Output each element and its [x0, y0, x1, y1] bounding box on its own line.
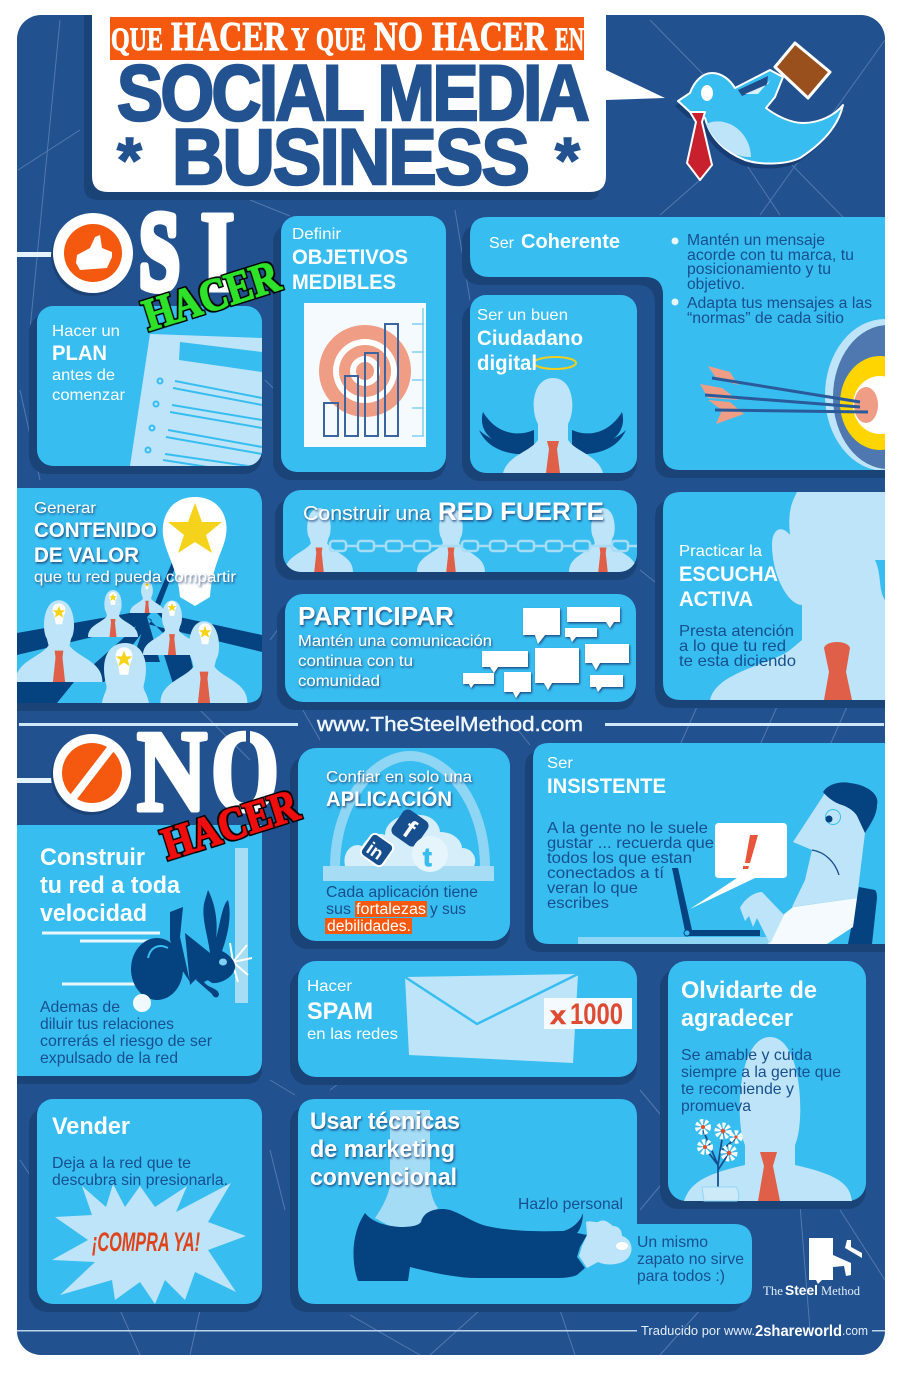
spam text: Hacer	[307, 978, 353, 995]
panel: red fuerte	[275, 490, 637, 580]
heading no: O	[211, 708, 279, 836]
panel: usar tecnicas de marketing	[290, 1099, 752, 1312]
participar text: comunidad	[298, 673, 380, 690]
vender body: Deja a la red que te	[52, 1155, 191, 1172]
coherente bullet list: posicionamiento y tu	[687, 261, 831, 278]
icon: envelope x1000: x	[550, 1000, 567, 1030]
icon: prohibited sign	[51, 734, 131, 815]
panel: plan	[29, 306, 262, 474]
logo: the steel method: Steel	[785, 1282, 818, 1298]
confiar body: y sus	[430, 901, 466, 918]
construir heading	[40, 844, 181, 927]
construir body: correrás el riesgo de ser	[40, 1033, 213, 1050]
objetivos text: OBJETIVOS	[292, 246, 408, 269]
illustration: social icons under dome	[323, 756, 494, 881]
illustration: man at laptop	[578, 782, 877, 944]
red fuerte text	[303, 498, 604, 526]
panel: vender	[29, 1099, 262, 1312]
contenido text	[34, 500, 237, 586]
olvidarte heading: Olvidarte de	[681, 977, 817, 1004]
icon: linkedin: in	[363, 838, 387, 864]
illustration: listening head	[710, 492, 885, 700]
heading si	[139, 188, 235, 315]
logo: the steel method: The	[763, 1283, 783, 1298]
panel: objetivos medibles	[273, 216, 446, 480]
plan text: antes de	[52, 367, 115, 384]
confiar body: fortalezas	[356, 901, 426, 918]
illustration: person with flowers	[684, 1037, 852, 1201]
compra ya: ¡COMPRA YA!	[92, 1227, 200, 1257]
orange title banner: Y	[291, 22, 309, 58]
insistente heading	[547, 755, 666, 798]
confiar body: Cada aplicación tiene	[326, 884, 478, 901]
panel: participar	[277, 594, 636, 710]
icon: facebook	[389, 807, 431, 850]
title: business: BUSINESS	[172, 112, 528, 201]
icon: speech bubbles	[463, 607, 629, 698]
heading no	[137, 708, 279, 836]
escucha heading: ESCUCHA	[679, 563, 778, 586]
panel: escucha activa	[655, 492, 885, 708]
icon: starburst	[52, 1183, 246, 1304]
label: green hacer: HACER	[137, 251, 286, 341]
insistente body: A la gente no le suele	[547, 820, 708, 837]
label: red hacer: HACER	[156, 780, 305, 870]
orange title banner: HACER	[432, 13, 547, 59]
participar text: Mantén una comunicación	[298, 633, 492, 650]
construir body: Ademas de	[40, 999, 120, 1016]
olvidarte heading: agradecer	[681, 1005, 793, 1032]
insistente body	[547, 820, 714, 912]
construir body	[40, 999, 213, 1067]
escucha body: te esta diciendo	[679, 653, 796, 670]
footer credit: 2shareworld	[755, 1323, 842, 1340]
contenido text: que tu red pueda compartir	[34, 569, 237, 586]
confiar heading: Confiar en solo una	[326, 769, 472, 786]
plan text: Hacer un	[52, 323, 120, 340]
spam text: SPAM	[307, 998, 373, 1025]
title: business: *	[117, 124, 142, 196]
usar body	[637, 1234, 744, 1285]
olvidarte body: te recomiende y	[681, 1081, 794, 1098]
insistente body: escribes	[547, 895, 609, 912]
heading si: S	[139, 190, 180, 314]
title: social media: SOCIAL MEDIA	[117, 48, 588, 137]
illustration: running rabbit	[42, 848, 252, 1012]
construir heading: velocidad	[40, 900, 147, 927]
usar body: para todos :)	[637, 1268, 725, 1285]
insistente heading: Ser	[547, 755, 574, 772]
red fuerte text: RED FUERTE	[438, 498, 604, 526]
contenido text: CONTENIDO	[34, 519, 157, 542]
confiar body	[325, 884, 478, 935]
usar heading	[310, 1108, 460, 1191]
icon: twitter: t	[423, 842, 432, 872]
coherente bullet list: Mantén un mensaje	[687, 232, 825, 249]
orange title banner: HACER	[171, 13, 287, 59]
insistente body: todos los que estan	[547, 850, 692, 867]
panel: ser coherente	[462, 217, 900, 478]
coherente bullet list: Adapta tus mensajes a las	[687, 295, 872, 312]
usar body: zapato no sirve	[637, 1251, 744, 1268]
confiar heading	[326, 769, 472, 811]
spam text	[307, 978, 398, 1043]
icon: target with arrows	[700, 319, 900, 471]
olvidarte heading	[681, 977, 817, 1032]
contenido text: Generar	[34, 500, 97, 517]
logo: the steel method	[763, 1238, 862, 1298]
escucha body	[679, 623, 796, 670]
heading no: N	[137, 708, 207, 836]
section si: badge and heading	[17, 188, 235, 315]
construir heading: Construir	[40, 844, 145, 871]
olvidarte body: promueva	[681, 1098, 751, 1115]
insistente body: gustar ... recuerda que	[547, 835, 714, 852]
orange title banner	[110, 13, 584, 60]
divider with website	[19, 714, 884, 736]
vender heading: Vender	[52, 1113, 130, 1140]
coherente bullet list: objetivo.	[687, 276, 745, 293]
icon: envelope x1000	[405, 974, 632, 1063]
usar heading: de marketing	[310, 1136, 455, 1163]
ciudadano text: digital	[477, 352, 537, 375]
hazlo personal: Hazlo personal	[518, 1196, 623, 1213]
red fuerte text: Construir una	[303, 503, 432, 525]
confiar body: debilidades.	[327, 918, 411, 935]
icon: document	[130, 334, 262, 472]
panel: olvidarte de agradecer	[660, 961, 866, 1209]
icon: light bulb with star	[163, 497, 227, 606]
construir body: expulsado de la red	[40, 1050, 178, 1067]
plan text: comenzar	[52, 387, 126, 404]
coherente bullet list: acorde con tu marca, tu	[687, 247, 854, 264]
panel: ser insistente	[525, 743, 885, 952]
footer credit	[17, 1323, 885, 1340]
coherente bullet list	[672, 232, 872, 327]
coherente heading: Ser	[489, 235, 515, 252]
ciudadano text: Ciudadano	[477, 327, 583, 350]
objetivos text	[292, 226, 408, 294]
orange title banner: EN	[555, 22, 584, 58]
orange title banner: QUE	[316, 22, 366, 58]
footer credit: .com	[842, 1323, 868, 1338]
participar text	[298, 601, 492, 690]
chart: target and bars	[304, 303, 426, 447]
vender body: descubra sin presionarla.	[52, 1172, 228, 1189]
footer credit: Traducido por www.	[641, 1323, 755, 1338]
usar heading: convencional	[310, 1164, 457, 1191]
usar heading: Usar técnicas	[310, 1108, 460, 1135]
icon: halo	[534, 357, 576, 369]
plan text	[52, 323, 126, 404]
insistente body: conectados a tí	[547, 865, 665, 882]
panel: confiar en una aplicacion	[290, 748, 510, 949]
contenido text: DE VALOR	[34, 544, 139, 567]
usar body: Un mismo	[637, 1234, 708, 1251]
panel: contenido de valor	[16, 488, 262, 711]
icon: linkedin	[359, 832, 395, 868]
illustration: crowd with ideas	[16, 562, 262, 703]
ciudadano text	[477, 307, 583, 375]
participar text: PARTICIPAR	[298, 601, 454, 631]
objetivos text: MEDIBLES	[292, 271, 396, 294]
icon: thumbs up	[51, 213, 133, 296]
title: business: *	[555, 124, 580, 196]
icon: facebook: f	[398, 814, 422, 844]
olvidarte body: Se amable y cuida	[681, 1047, 812, 1064]
olvidarte body	[681, 1047, 841, 1115]
panel: construir a toda velocidad	[17, 825, 262, 1084]
ciudadano text: Ser un buen	[477, 307, 568, 324]
section no: badge and heading	[17, 708, 279, 836]
insistente body: veran lo que	[547, 880, 638, 897]
icon: twitter bird with tie and briefcase	[675, 43, 843, 180]
icon: twitter	[412, 836, 448, 872]
icon: envelope x1000: 1000	[570, 998, 623, 1031]
coherente bullet list: “normas” de cada sitio	[687, 310, 844, 327]
orange title banner: QUE	[111, 22, 163, 58]
vender body	[52, 1155, 228, 1189]
heading si: I	[200, 188, 235, 315]
confiar body: sus	[326, 901, 351, 918]
escucha body: Presta atención	[679, 623, 794, 640]
icon: angel person	[479, 378, 626, 473]
spam text: en las redes	[307, 1026, 398, 1043]
coherente heading: Coherente	[521, 231, 620, 253]
panel: ciudadano digital	[462, 295, 637, 481]
escucha heading	[679, 543, 778, 611]
insistente heading: INSISTENTE	[547, 775, 666, 798]
panel: hacer spam	[290, 961, 637, 1085]
olvidarte body: siempre a la gente que	[681, 1064, 841, 1081]
orange title banner: NO	[374, 13, 423, 59]
escucha body: a lo que tu red	[679, 638, 786, 655]
logo: the steel method: Method	[821, 1283, 860, 1298]
header speech panel	[84, 13, 665, 201]
illustration: shoe and hand	[354, 1110, 632, 1281]
plan text: PLAN	[52, 342, 107, 365]
escucha heading: Practicar la	[679, 543, 762, 560]
escucha heading: ACTIVA	[679, 588, 753, 611]
construir heading: tu red a toda	[40, 872, 181, 899]
participar text: continua con tu	[298, 653, 413, 670]
illustration: linked people	[285, 508, 637, 572]
divider with website: www.TheSteelMethod.com	[316, 714, 583, 736]
confiar heading: APLICACIÓN	[326, 787, 452, 811]
construir body: diluir tus relaciones	[40, 1016, 174, 1033]
objetivos text: Definir	[292, 226, 342, 243]
